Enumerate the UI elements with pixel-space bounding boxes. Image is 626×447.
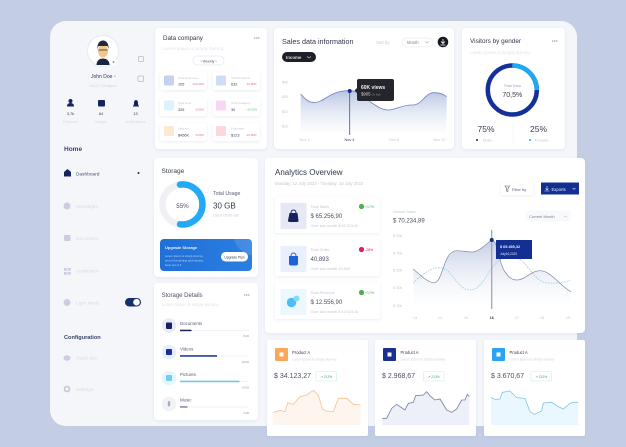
stat: notifications: Notifications <box>126 120 145 124</box>
y axis labels <box>393 234 402 308</box>
nav: settings <box>64 386 94 393</box>
current month selector: Current Month <box>529 214 555 219</box>
heading: Data company <box>163 35 204 42</box>
storage usage: Total Usage <box>213 191 241 197</box>
income selector: Income <box>286 55 302 60</box>
tooltip <box>496 240 532 259</box>
x axis labels: Nov 12 <box>433 138 446 142</box>
card: total sales: Total Sales <box>310 205 329 209</box>
icon: product blue <box>492 348 505 361</box>
panel: visitors by gender <box>462 28 565 149</box>
stat: images: Images <box>95 120 107 124</box>
card: total order: Over last month 33,869 <box>310 267 350 271</box>
nav: application: Application <box>76 268 100 274</box>
menu dots: ··· <box>552 39 558 45</box>
x axis labels: 19 <box>566 316 570 320</box>
heading: home: Home <box>64 146 82 153</box>
stat: total category: Total Category <box>231 101 251 105</box>
card: total revenue: Over last month $ 10.523,40 <box>310 310 358 314</box>
storage usage <box>213 191 241 218</box>
donut chart <box>488 66 537 114</box>
card: total order: 40,893 <box>310 257 330 263</box>
upgrade banner <box>160 239 252 271</box>
panel: product card 3: Lorem Ipsum is simply dummy <box>510 358 554 362</box>
row: music: 1GB <box>243 411 249 415</box>
tooltip: 60K views <box>361 85 385 91</box>
upgrade button: Upgrade Plan <box>224 255 245 259</box>
profile name: John Doe ▫ <box>91 74 116 80</box>
row: videos: Videos <box>180 346 194 352</box>
x axis labels: 16 <box>490 316 494 320</box>
upgrade banner: been put of it <box>165 263 181 267</box>
month selector <box>402 38 433 47</box>
menu dots: ··· <box>244 293 250 299</box>
row: pictures: 14GB <box>241 386 249 390</box>
x axis labels: 13 <box>413 316 417 320</box>
subtitle: Lorem Ipsum is simply dummy <box>162 302 219 307</box>
upgrade banner: Lorem Ipsum is simply dummy <box>165 254 203 258</box>
heading: Storage Details <box>162 293 203 299</box>
row: videos: 10GB <box>241 360 249 364</box>
filter button: Filter by <box>512 187 526 192</box>
y axis labels: $40 <box>282 80 288 84</box>
stat: balance: -5.00% <box>195 133 204 137</box>
stat: total expenses: Total Expenses <box>178 76 199 80</box>
profile avatar <box>88 36 118 66</box>
line chart <box>413 230 571 309</box>
sparkline <box>382 392 469 425</box>
stat: images <box>95 100 107 124</box>
stat: followers: 3,7k <box>67 112 74 116</box>
row: music <box>162 397 249 415</box>
y axis labels: $10 <box>282 124 288 128</box>
stat: total category: +15.00% <box>246 108 258 112</box>
row: documents: Documents <box>180 321 203 326</box>
heading: Visitors by gender <box>470 38 522 45</box>
legend: female: Female <box>535 138 549 142</box>
product value: $ 34.123,27 <box>274 373 311 380</box>
x axis labels <box>300 138 446 142</box>
stat: total products: -10.00% <box>246 82 257 86</box>
nav: messages: Messages <box>76 204 98 210</box>
y axis labels: $30 <box>282 95 288 99</box>
storage usage: 30 GB <box>213 202 236 210</box>
y axis labels: $ 70k <box>393 252 402 256</box>
stat: total user: Total User <box>178 101 192 105</box>
stat: total user <box>160 98 207 116</box>
storage usage: Used Of 80 GB <box>213 214 239 218</box>
heading: Storage <box>162 168 185 175</box>
nav: document <box>64 235 99 242</box>
x axis labels: Nov 1 <box>300 138 309 142</box>
overall sales <box>393 210 425 224</box>
profile role: UI/UX Designer <box>89 83 118 88</box>
card: total revenue: Total Revenue <box>310 291 335 295</box>
exports button: Exports <box>552 187 566 192</box>
panel: product card 2: Lorem Ipsum is simply dummy <box>400 358 445 362</box>
stat: balance: Balance <box>178 126 189 130</box>
income selector <box>282 52 316 62</box>
card: total sales: Over last month $ 52.023,40 <box>310 224 358 228</box>
stat: total expenses <box>160 72 207 90</box>
nav: messages <box>64 202 98 210</box>
stat: images: 64 <box>99 112 103 116</box>
y axis labels: $ 90k <box>393 234 402 238</box>
x axis labels: 18 <box>540 316 544 320</box>
panel: product card 3 <box>484 340 585 436</box>
card: total sales <box>275 197 380 233</box>
stat: total products: Total Products <box>231 76 251 80</box>
donut chart: Total Data <box>504 84 522 88</box>
date range: Monday, 12 July 2022 - Tuesday, 19 July 2022 <box>275 181 364 186</box>
card: total order: -28% <box>365 248 373 252</box>
heading: Analytics Overview <box>275 168 343 177</box>
legend: female: 25% <box>530 124 547 134</box>
tooltip: July16,2022 <box>500 252 517 256</box>
product value: $ 2.968,67 <box>382 373 415 380</box>
row: documents <box>162 318 249 338</box>
stat: total products <box>213 72 260 90</box>
side icons <box>138 56 144 82</box>
stat: balance <box>160 123 207 141</box>
panel: sales data information <box>274 28 454 149</box>
nav: dashboard <box>64 169 140 178</box>
month selector: Month <box>407 40 419 45</box>
card: total revenue: $ 12.556,90 <box>310 300 343 306</box>
weekly selector: ‹ Weekly › <box>200 59 217 63</box>
storage donut: 55% <box>176 203 189 210</box>
stat: total category <box>213 98 260 116</box>
upgrade banner: Upgrade Storage <box>165 245 198 250</box>
panel: product card 1 <box>267 340 368 436</box>
row: music: Music <box>180 398 192 402</box>
row: videos <box>162 345 249 364</box>
card: total sales: $ 65.256,90 <box>310 214 343 220</box>
background panel <box>50 21 577 426</box>
stat: total products: 632 <box>231 82 237 86</box>
y axis labels <box>282 80 288 128</box>
panel: product card 2 <box>375 340 476 436</box>
stat: notifications <box>126 100 145 124</box>
current month selector <box>526 210 571 222</box>
menu dots: ··· <box>254 36 260 42</box>
growth badge: ↗ 213% <box>320 375 332 379</box>
subtitle: Lorem Ipsum is simply dummy <box>470 50 532 55</box>
nav: settings: Settings <box>76 387 94 393</box>
panel: analytics overview <box>265 158 585 333</box>
x axis labels: 17 <box>515 316 519 320</box>
x axis labels <box>413 316 570 320</box>
stat: expenses: $123 <box>231 134 239 138</box>
stat: total user: -5.00% <box>195 108 204 112</box>
x axis labels: Nov 8 <box>389 138 399 142</box>
nav: stack dev <box>64 355 98 362</box>
x axis labels: 15 <box>464 316 468 320</box>
stat: expenses: Expenses <box>231 126 245 130</box>
subtitle: Lorem Ipsum is simply dummy <box>163 46 225 51</box>
y axis labels: $ 50k <box>393 268 402 272</box>
stat: followers <box>63 99 78 124</box>
legend: female <box>529 124 549 142</box>
stat: notifications: 13 <box>133 112 138 116</box>
donut chart: 70,5% <box>502 92 522 99</box>
nav: dashboard: Dashboard <box>76 172 100 178</box>
download button <box>438 37 448 47</box>
stat: followers: Followers <box>63 120 78 124</box>
product title: Product A <box>292 350 310 355</box>
nav: stack dev: Stack dev <box>76 356 98 362</box>
growth badge: ↗ 213% <box>535 375 547 379</box>
tooltip <box>354 79 394 101</box>
product title: Product A <box>510 350 528 355</box>
card: total revenue: +17% <box>365 291 374 295</box>
stat: balance: $456K <box>178 134 189 138</box>
x axis labels: Nov 4 <box>345 138 354 142</box>
upgrade banner: text of the printing and industry <box>165 258 204 262</box>
legend: male <box>476 124 495 142</box>
icon: product navy <box>383 348 396 361</box>
overall sales: $ 70.234,89 <box>393 218 425 224</box>
tooltip: $ 65.495,32 <box>500 245 520 249</box>
exports button <box>541 182 579 194</box>
y axis labels: $20 <box>282 110 288 114</box>
card: total order: Total Order <box>310 248 330 252</box>
sort label: Sort by: <box>376 40 390 45</box>
stat: expenses: -16.00% <box>246 133 257 137</box>
icon: product orange <box>275 348 288 361</box>
overall sales: Overall Sales <box>393 210 416 214</box>
panel: product card 1: Lorem Ipsum is simply dummy <box>292 358 337 362</box>
x axis labels: 14 <box>438 316 442 320</box>
legend: male: Male <box>483 138 492 142</box>
card: total revenue <box>275 283 380 319</box>
nav: light mode with toggle: Light Mode <box>76 300 100 306</box>
product title: Product A <box>400 350 419 355</box>
stat: total expenses: 105 <box>178 82 184 86</box>
stat: expenses <box>213 123 260 141</box>
nav: document: Document <box>76 236 99 242</box>
sparkline <box>273 390 361 425</box>
row: pictures: Pictures <box>180 372 197 377</box>
filter button <box>501 183 533 195</box>
growth badge: ↗ 213% <box>428 375 440 379</box>
legend: male: 75% <box>477 124 495 134</box>
heading: Sales data information <box>282 37 354 46</box>
card: total sales: +17% <box>365 205 374 209</box>
product value: $ 3.670,67 <box>491 373 524 380</box>
card: total order <box>275 240 380 276</box>
stat: total user: 325 <box>178 108 184 112</box>
tooltip: $905 On Sale <box>361 92 381 96</box>
heading: configuration: Configuration <box>64 335 101 341</box>
nav: light mode with toggle <box>64 298 141 306</box>
panel: sidebar <box>63 36 145 393</box>
panel: data company <box>155 28 267 149</box>
y axis labels: $ 10k <box>393 304 402 308</box>
area line chart <box>301 89 447 135</box>
row: documents: 6GB <box>243 334 249 338</box>
row: pictures <box>162 371 249 390</box>
y axis labels: $ 30k <box>393 286 402 290</box>
panel: storage details <box>154 283 258 420</box>
panel: storage <box>154 158 258 277</box>
stat: total expenses: -100.00% <box>192 82 204 86</box>
stat: total category: 30 <box>231 108 235 112</box>
sparkline <box>491 391 578 425</box>
nav: application <box>64 268 100 275</box>
